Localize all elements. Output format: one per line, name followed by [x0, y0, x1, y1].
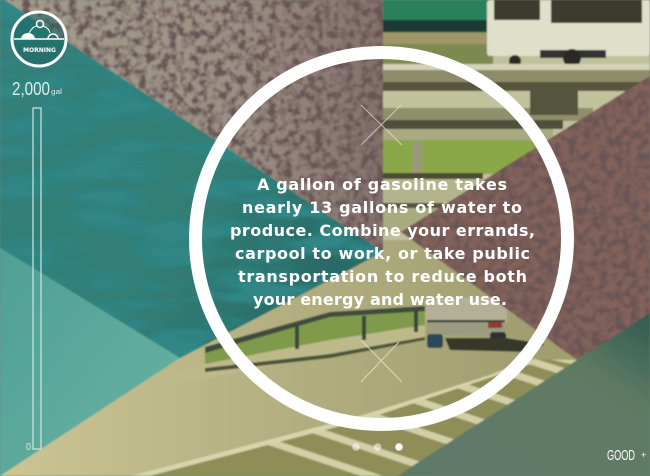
- central message text: transportation to reduce both: [238, 267, 527, 286]
- lower guardrail: [205, 306, 425, 353]
- curb: [205, 337, 425, 372]
- central message text: your energy and water use.: [253, 290, 507, 309]
- panel: sea: [0, 0, 383, 358]
- central message text: produce. Combine your errands,: [230, 221, 535, 240]
- panel: right gravel: [401, 76, 650, 360]
- panel: top gravel: [5, 0, 383, 252]
- guardrail posts: [362, 316, 366, 340]
- grass strip: [205, 308, 425, 364]
- decorative cross: lower: [361, 340, 402, 382]
- top photo: truck and van: [383, 0, 650, 240]
- gauge max label: gal: [51, 89, 63, 96]
- central message text: A gallon of gasoline takes: [257, 175, 507, 194]
- verge: [150, 325, 425, 386]
- pagination dots: [352, 443, 403, 451]
- zebra crossing: [132, 358, 577, 476]
- gauge zero label: 0: [26, 442, 31, 453]
- panel: light teal triangle: [0, 248, 180, 476]
- central message text: [230, 175, 535, 309]
- car: [425, 298, 545, 352]
- gauge max label: 2,000: [12, 79, 50, 99]
- icon: morning badge: [12, 12, 66, 66]
- decorative cross: upper: [361, 105, 402, 145]
- icon: morning badge: MORNING: [23, 46, 56, 54]
- central message text: nearly 13 gallons of water to: [242, 198, 522, 217]
- panel: dark green lower right: [397, 313, 650, 476]
- good label: +: [641, 450, 646, 460]
- gauge bar: [33, 108, 41, 449]
- white ring: [196, 52, 568, 424]
- central message text: carpool to work, or take public: [235, 244, 530, 263]
